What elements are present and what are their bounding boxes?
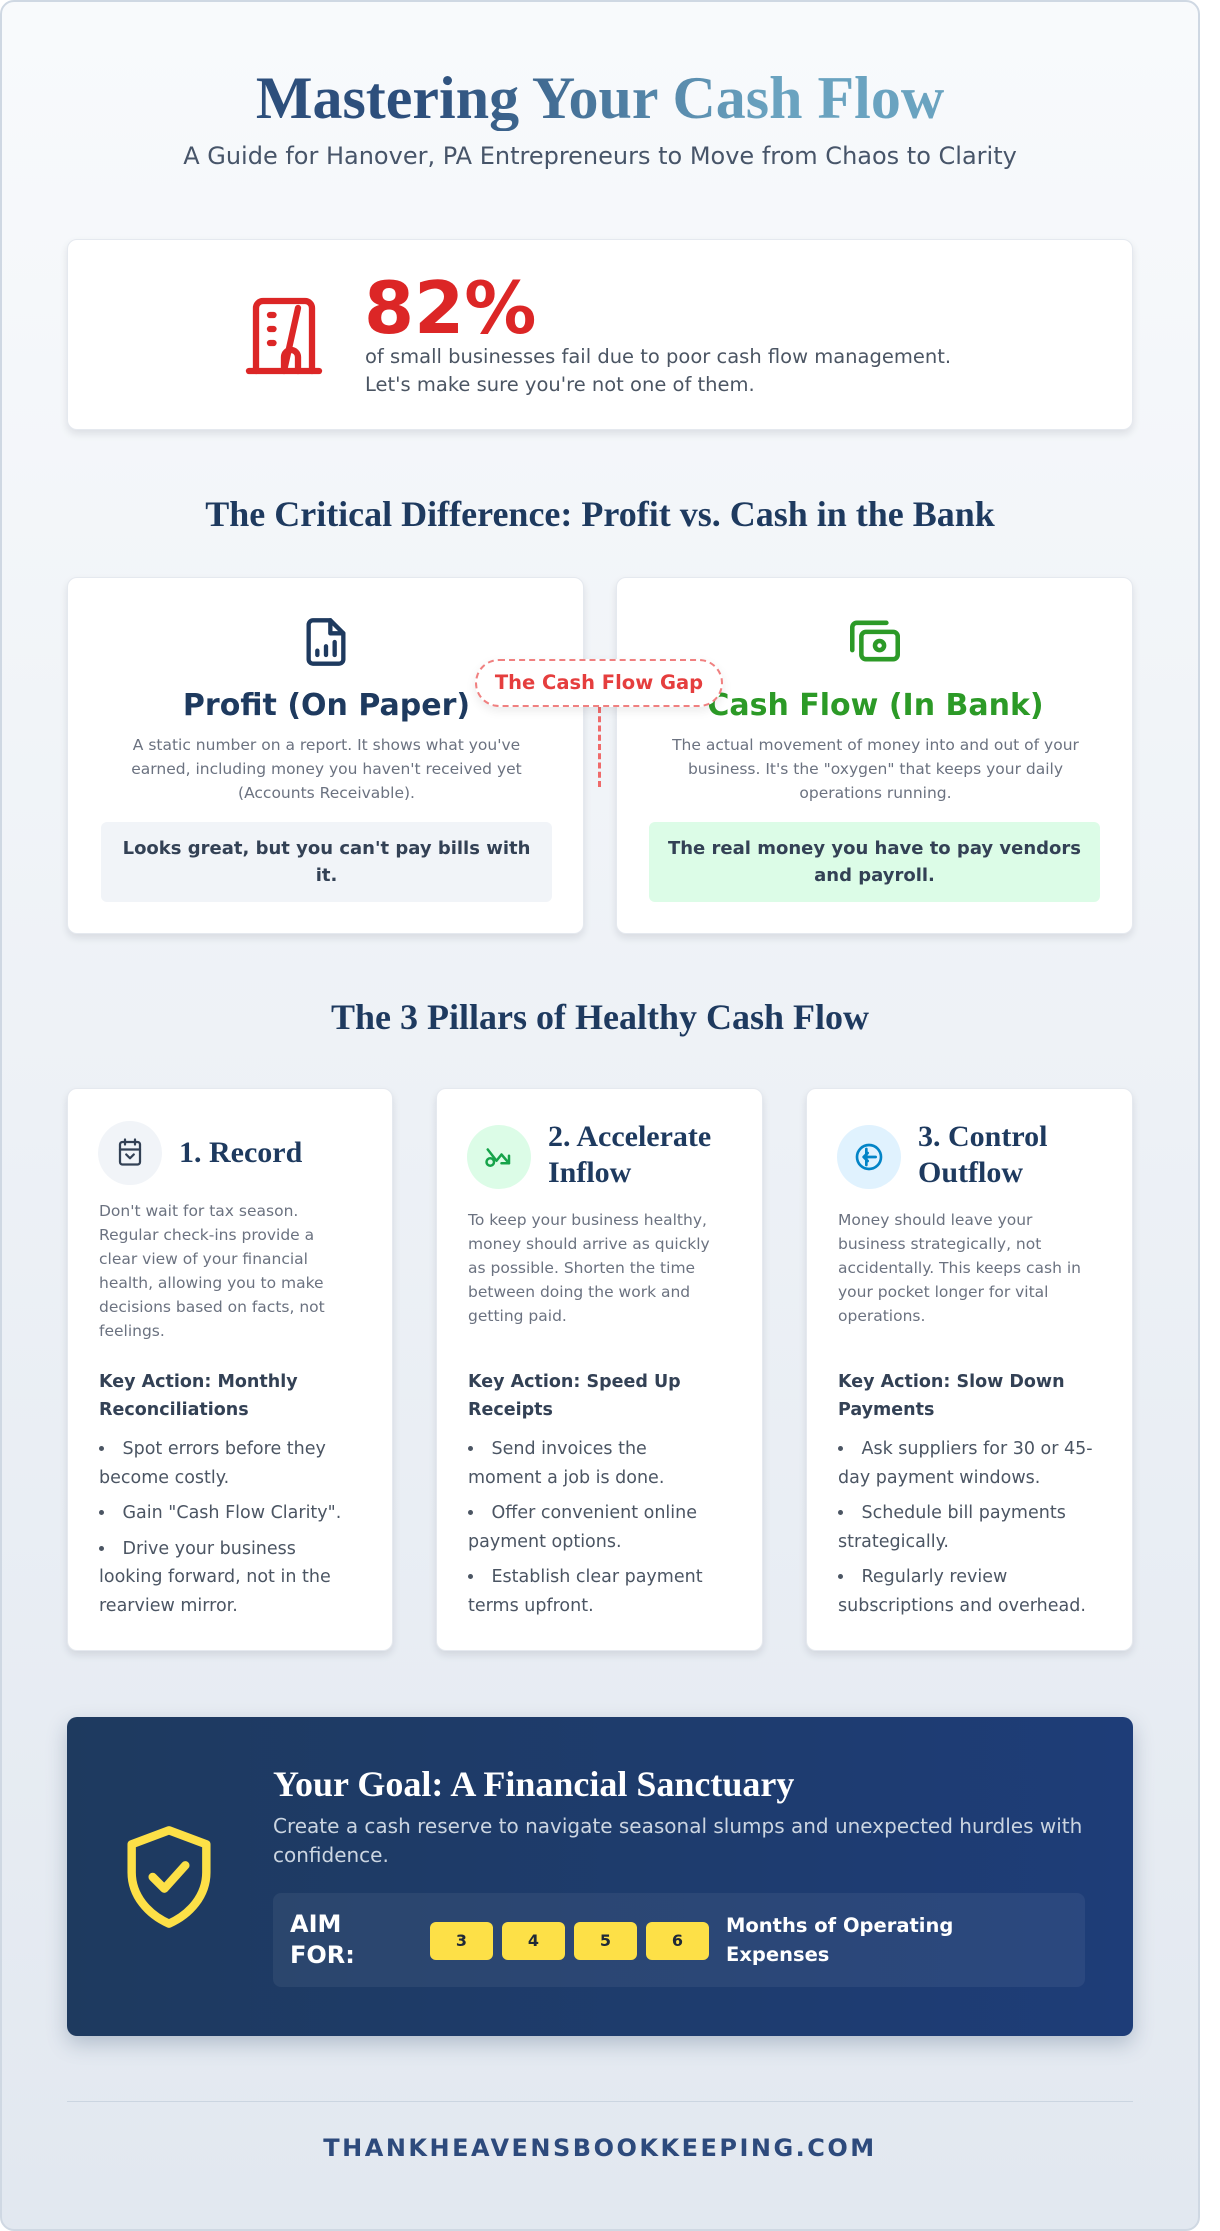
callout: cash flow gap (475, 659, 723, 707)
title: accelerate: 2. Accelerate (548, 1120, 711, 1153)
panel: record (67, 1088, 393, 1651)
stat card (67, 239, 1133, 430)
list: accelerate: Send invoices the moment a job is done. (468, 1439, 664, 1488)
key action: control: Key Action: Slow Down Payments (838, 1372, 1065, 1420)
text: cash desc: The actual movement of money into and out of your business. It's the "oxygen" that keeps your daily operations running. (672, 736, 1079, 802)
subtitle: A Guide for Hanover, PA Entrepreneurs to Move from Chaos to Clarity (183, 142, 1017, 170)
yellow month boxes: 3 (456, 1931, 467, 1950)
icon: money (850, 620, 900, 662)
panel: profit (67, 577, 584, 934)
title: record: 1. Record (179, 1136, 302, 1169)
panel: accelerate (436, 1088, 763, 1651)
callout: profit (101, 822, 552, 902)
callout: profit: Looks great, but you can't pay bills with it. (123, 838, 530, 886)
months text: Expenses (726, 1943, 829, 1966)
list: control: Ask suppliers for 30 or 45-day payment windows. (838, 1439, 1093, 1488)
key action: accelerate: Key Action: Speed Up Receipts (468, 1372, 681, 1420)
icon: trend (467, 1125, 531, 1189)
footer: THANKHEAVENSBOOKKEEPING.COM (323, 2134, 877, 2162)
title: control: Outflow (918, 1156, 1023, 1189)
icon: outflow (837, 1125, 901, 1189)
months text: Months of Operating (726, 1914, 953, 1937)
heading: goal: Your Goal: A Financial Sanctuary (273, 1764, 794, 1804)
stat text (365, 345, 951, 396)
heading: critical difference: The Critical Difference: Profit vs. Cash in the Bank (205, 494, 995, 534)
title: profit: Profit (On Paper) (183, 688, 470, 723)
stat number: 82% (364, 266, 536, 350)
text: control desc: Money should leave your business strategically, not accidentally. This keeps cash in your pocket longer for vital operations. (838, 1211, 1081, 1325)
icon: shield (127, 1826, 211, 1928)
title: accelerate: Inflow (548, 1156, 631, 1189)
label: aim for: FOR: (290, 1941, 355, 1969)
callout: cash (649, 822, 1100, 902)
list: accelerate (468, 1439, 703, 1616)
list: record: Gain "Cash Flow Clarity". (122, 1503, 341, 1523)
title: Mastering Your Cash Flow (256, 65, 944, 131)
list: accelerate: Offer convenient online payment options. (468, 1503, 697, 1552)
title: control (918, 1120, 1047, 1189)
text: accelerate desc: To keep your business healthy, money should arrive as quickly as possible. Shorten the time between doing the work and getting paid. (468, 1211, 710, 1325)
text: goal desc: Create a cash reserve to navigate seasonal slumps and unexpected hurdles with confidence. (273, 1814, 1082, 1867)
heading: pillars: The 3 Pillars of Healthy Cash Flow (331, 997, 869, 1037)
yellow month boxes: 5 (600, 1931, 611, 1950)
panel: control (806, 1088, 1133, 1651)
callout: cash flow gap: The Cash Flow Gap (495, 671, 703, 694)
icon: document chart (306, 618, 346, 666)
title: cash flow: Cash Flow (In Bank) (707, 688, 1044, 723)
list: control: Regularly review subscriptions and overhead. (838, 1567, 1086, 1616)
arrow: gap dashed line (598, 707, 601, 787)
list: control: Schedule bill payments strategically. (838, 1503, 1066, 1552)
panel: goal (67, 1717, 1133, 2036)
list: accelerate: Establish clear payment terms upfront. (468, 1567, 703, 1616)
yellow month boxes: 6 (672, 1931, 683, 1950)
list: control (838, 1439, 1093, 1616)
text: record desc: Don't wait for tax season. Regular check-ins provide a clear view of your financial health, allowing you to make decisions based on facts, not feelings. (99, 1202, 325, 1340)
icon: building (246, 298, 322, 374)
stat text: of small businesses fail due to poor cash flow management. (365, 345, 951, 368)
key action: record: Key Action: Monthly Reconciliations (99, 1372, 298, 1420)
label: aim for: AIM (290, 1910, 341, 1938)
months text (726, 1914, 953, 1966)
panel: cash flow (616, 577, 1133, 934)
label: aim for (290, 1910, 355, 1969)
text: profit desc: A static number on a report. It shows what you've earned, including money you haven't received yet (Accounts Receivable). (131, 736, 522, 802)
title: accelerate (548, 1120, 711, 1189)
list: record: Drive your business looking forward, not in the rearview mirror. (99, 1538, 331, 1616)
list: record (99, 1439, 341, 1616)
yellow month boxes: 4 (528, 1931, 539, 1950)
icon: calendar check (98, 1121, 162, 1185)
stat text: Let's make sure you're not one of them. (365, 373, 755, 396)
title: control: 3. Control (918, 1120, 1047, 1153)
list: record: Spot errors before they become costly. (99, 1439, 326, 1488)
aim box (273, 1893, 1085, 1987)
yellow month boxes (430, 1922, 709, 1960)
callout: cash: The real money you have to pay vendors and payroll. (668, 838, 1081, 886)
